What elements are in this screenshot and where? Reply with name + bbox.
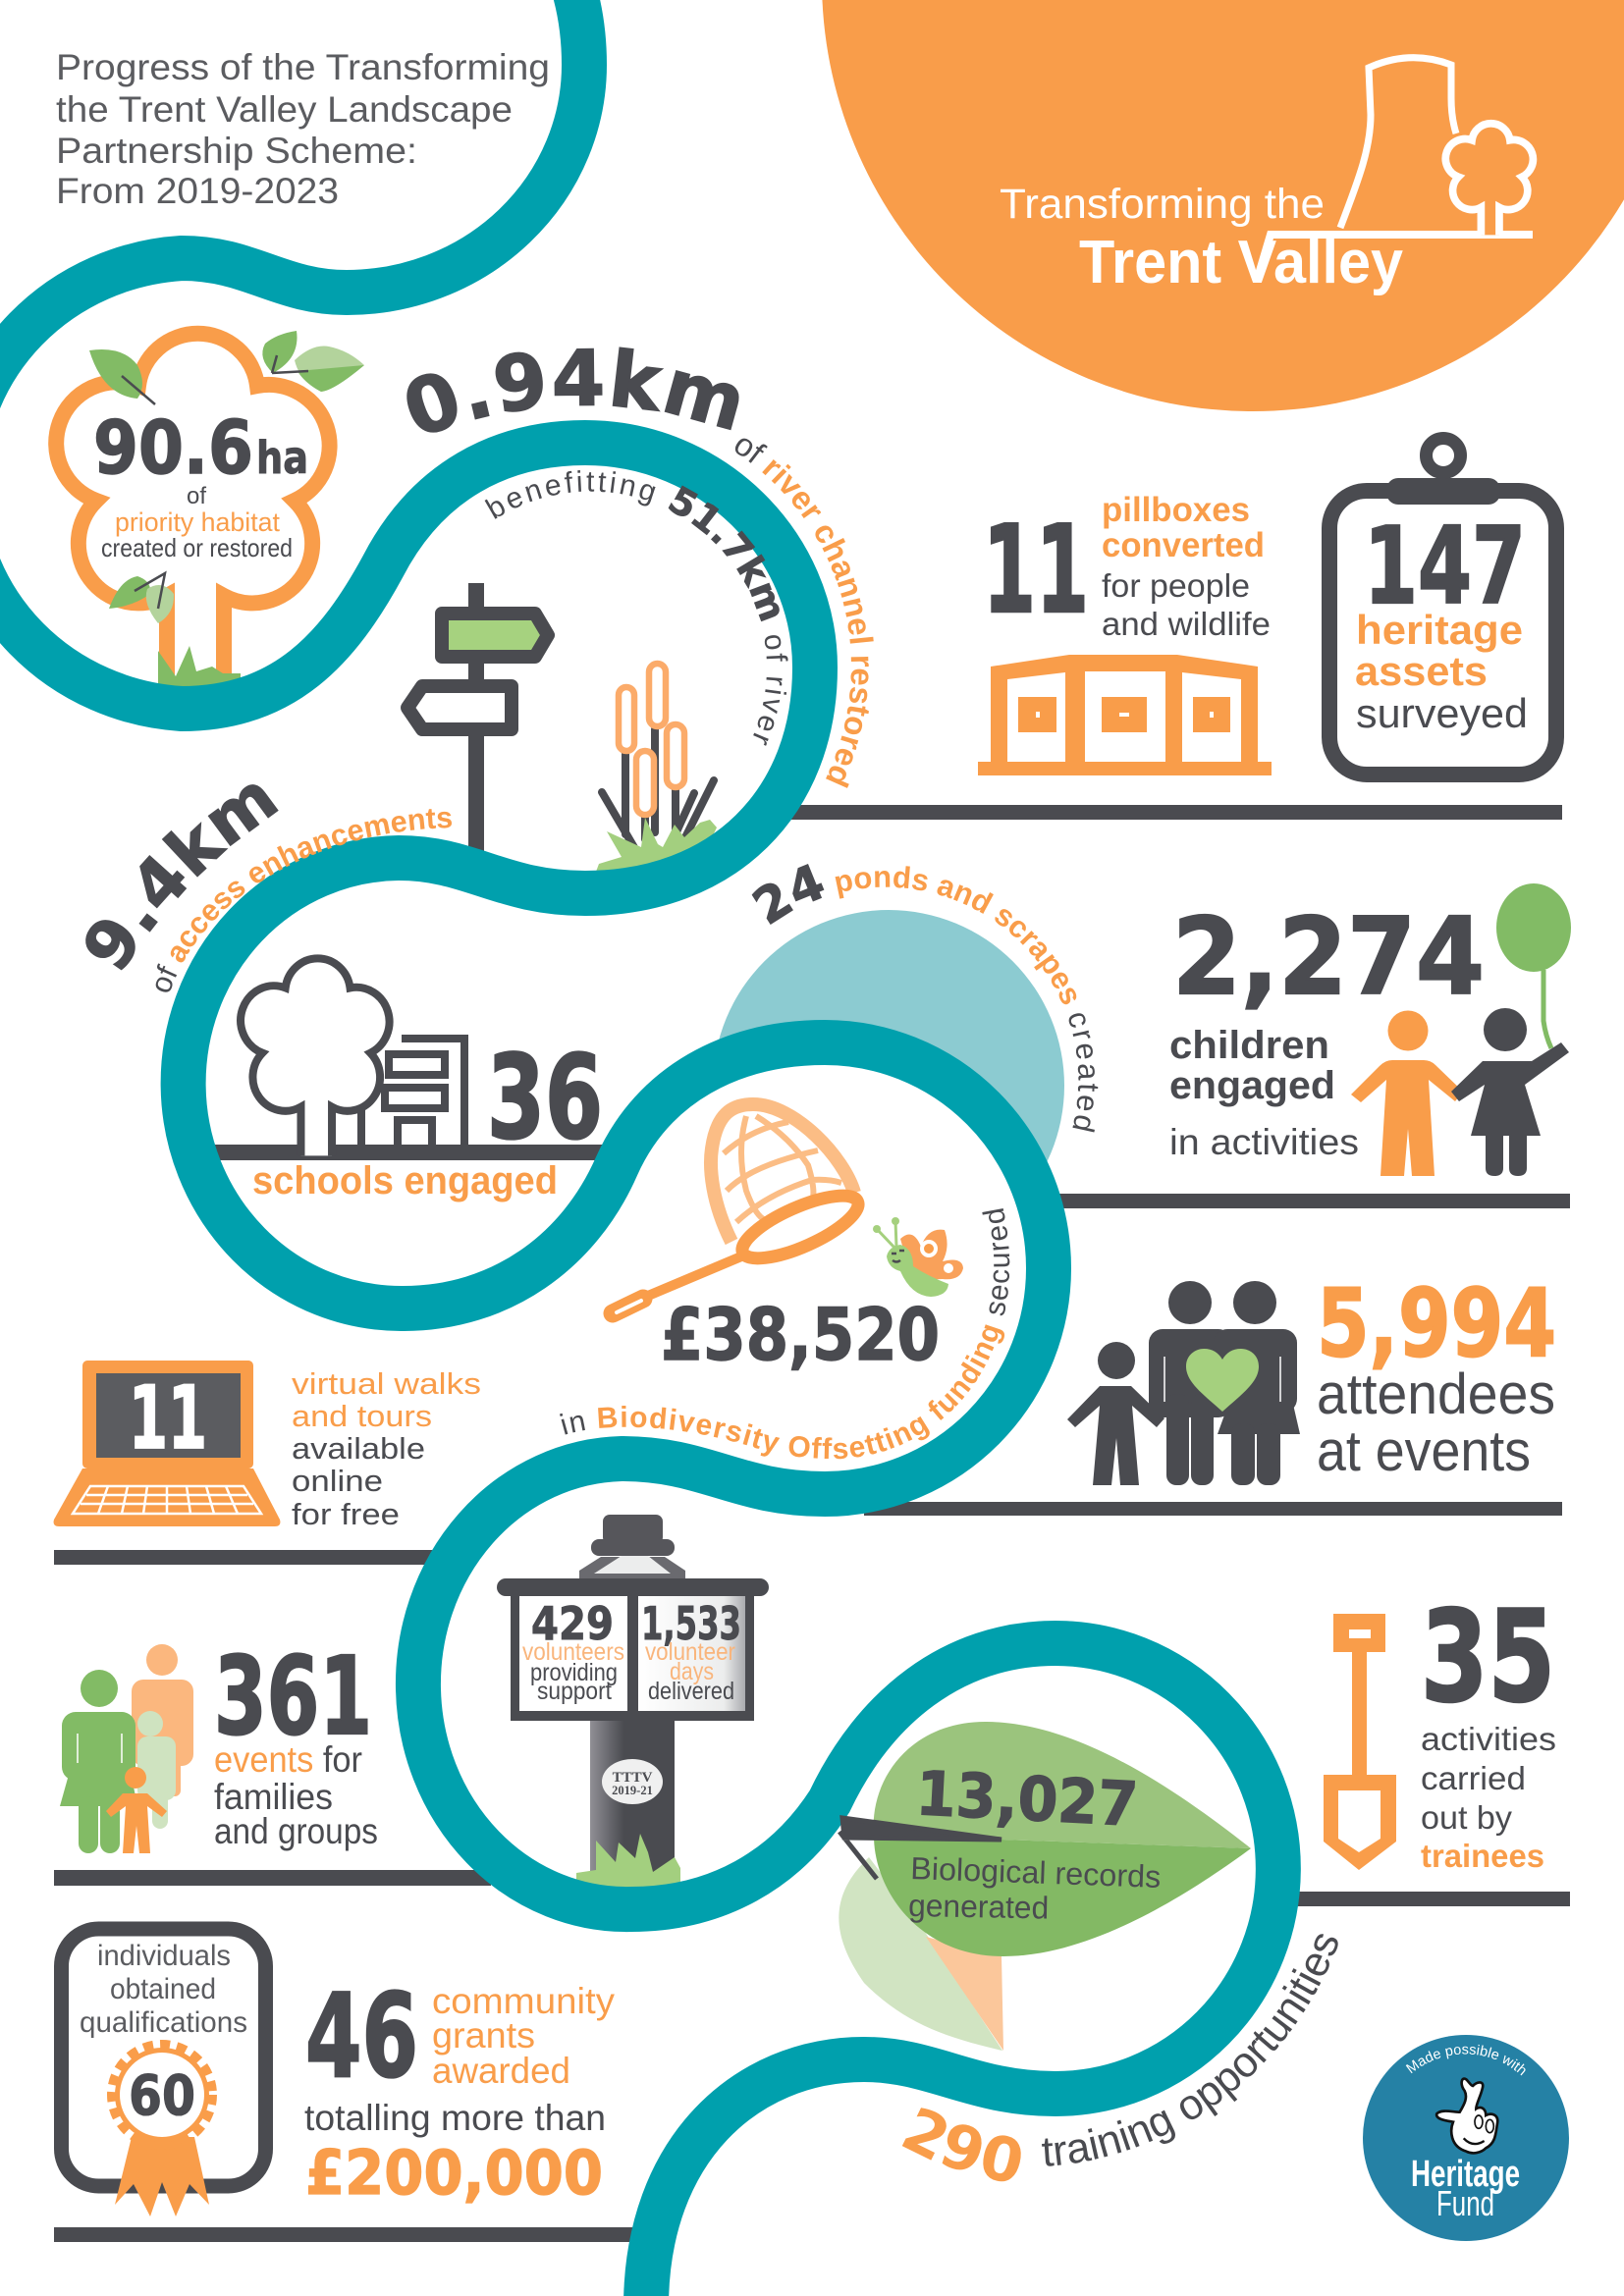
stat: 90.6ha priority habitat: created or restored [101,533,293,562]
laptop base [54,1468,280,1526]
icon: signpost [407,583,548,853]
balloon string [1543,970,1551,1048]
stat: virtual walks: and tours [292,1399,432,1433]
icon: butterfly net [613,1104,866,1313]
panel: clipboard 147 heritage assets [1329,438,1556,774]
stat: 361 events [214,1633,378,1851]
curved text: in Biodiversity Offsetting funding secured: in Biodiversity Offsetting funding secured [560,1208,1009,1459]
post plaque: 2019-21 [612,1784,653,1797]
leaf text [908,1850,1162,1925]
curved text: access enhancements: of access enhancements [155,809,452,992]
title: the Trent Valley Landscape [56,89,513,130]
shovel blade [1324,1775,1396,1870]
panel: clipboard 147 heritage assets: assets [1355,648,1488,694]
clipboard ring [1426,438,1461,473]
stat: virtual walks: available [292,1431,425,1466]
curved text: river channel restored: of river channel restored [734,438,874,788]
leaf top right dark [262,331,297,373]
icon: orange tree with leaves [56,331,364,692]
stat: 36 schools: schools engaged [252,1159,558,1202]
stat: 90.6ha priority habitat: 90.6 [93,404,253,491]
volunteers text: 429 [531,1597,614,1650]
shovel handle [1333,1614,1385,1652]
stat: 46 community grants [304,1968,616,2209]
logo: Heritage Fund [1363,2035,1569,2241]
orange child [1351,1011,1463,1176]
shovel shaft [1352,1652,1367,1775]
icon: people group [60,1644,193,1853]
volunteers text: providing [530,1659,618,1686]
badge arc text: Made possible with [1406,2044,1526,2075]
curved text: benefitting 51.7km of river: benefitting 51.7km of river [485,470,787,746]
logo text line 2: Trent Valley [1079,229,1403,296]
keyboard [73,1486,261,1514]
qualifications text [80,1940,247,2039]
butterfly wings [900,1230,963,1279]
stat: virtual walks [292,1366,481,1531]
icon: logo tree [1445,124,1533,235]
stat: 11 pillboxes: 11 [983,501,1089,641]
butterfly antennae [877,1221,896,1249]
family man [1168,1281,1212,1324]
title: From 2019-2023 [56,171,339,211]
rosette: 60 [129,2064,195,2128]
icon: butterfly [873,1217,963,1297]
title: Progress of the Transforming [56,47,550,87]
stat: 2,274 children: engaged [1169,1064,1335,1107]
reed stems [602,729,714,849]
clipboard clip [1386,478,1500,505]
net grip [613,1299,643,1313]
stat: 90.6ha priority habitat: ha [256,432,308,484]
stat: 46 community grants: community [432,1981,616,2021]
rosette [112,2045,212,2216]
stat: 11 pillboxes: for people [1102,567,1250,604]
tree outline [56,334,330,682]
panel: clipboard 147 heritage assets: surveyed [1356,690,1528,736]
volunteers text: volunteers [522,1638,624,1666]
icon: crossed fingers hand [1436,2079,1497,2153]
arm gaps [1164,1357,1280,1402]
icon: pillbox [978,655,1272,775]
circle interior mask [599,1042,1047,1494]
post roof [497,1578,769,1596]
leaf bottom left [109,576,150,609]
stat: 35 activities: 35 [1421,1584,1555,1731]
qualifications frame [61,1929,265,2186]
pale leaf [839,1857,1002,2051]
curved text: 24 ponds and scrapes created: 24 ponds and scrapes created [752,864,1098,1133]
stat: 36 schools [252,1030,603,1202]
icon: cooling tower [1340,58,1456,228]
stat: £38,520: £38,520 [661,1294,940,1377]
dark child [1451,1008,1569,1176]
leaf text: generated [908,1888,1049,1925]
stat: 11 pillboxes: converted [1102,526,1265,564]
green woman [60,1670,137,1853]
logo text line 1: Transforming the [1000,181,1325,228]
volunteer days text: days [670,1658,714,1685]
post panel right [638,1596,745,1711]
stat: 2,274 children: in activities [1169,1122,1359,1162]
stat: 290 curved: 290 [901,2108,1021,2181]
leaf number: 13,027 [914,1757,1140,1841]
heart [1186,1349,1259,1412]
icon: large leaf with records [839,1722,1251,2051]
qualifications text: obtained [110,1973,216,2005]
badge circle [1363,2035,1569,2241]
stat: 46 community grants: grants [432,2015,535,2056]
pond circle [713,910,1064,1261]
badge text: Heritage [1411,2154,1520,2195]
balloon [1496,883,1571,972]
icon: reeds [596,664,717,888]
divider lines [54,805,1570,2242]
logo ground line [1257,235,1533,281]
light green child [137,1711,176,1829]
peach leaf [926,1937,1003,2051]
volunteer days text: 1,533 [641,1597,741,1650]
volunteer days text: volunteer [645,1638,735,1666]
panel: clipboard 147 heritage assets: heritage [1356,607,1523,653]
leaf bottom right [146,585,174,623]
stat: 5,994 attendees: 5,994 [1317,1270,1556,1378]
stat: 35 activities: activities [1421,1721,1556,1757]
laptop screen [96,1373,241,1458]
stat: 35 activities: out by [1421,1799,1513,1836]
post plaque: TTTV [613,1770,653,1786]
stat: 2,274 children: children [1169,1024,1329,1067]
icon: volunteer post [497,1515,769,1895]
post shaft [590,1718,675,1893]
stat: 36 schools: 36 [487,1030,603,1165]
volunteers text: support [537,1678,612,1705]
post grass [576,1834,680,1895]
clipboard text: 147 [1364,506,1526,628]
stat: virtual walks: virtual walks [292,1366,481,1401]
orange child [106,1767,167,1853]
post [468,583,484,853]
net mesh [724,1116,841,1222]
leaf stems [122,355,308,609]
icon: children with balloon [1351,883,1571,1176]
stat: 5,994 attendees: at events [1317,1419,1531,1483]
panel: 60 qualifications [61,1929,265,2216]
icon: family with heart [1067,1281,1300,1485]
stat: virtual walks: online [292,1464,383,1498]
title [56,47,550,211]
leaf top left [89,349,142,399]
stat: 9.4km curved: 9.4km [85,784,279,970]
butterfly body [887,1245,948,1297]
stat: 90.6ha priority habitat [93,404,308,562]
stat: 35 activities: trainees [1421,1838,1544,1874]
stat: 46 community grants: awarded [432,2051,570,2091]
logo: Heritage Fund: Fund [1436,2183,1494,2223]
stat: 35 activities: carried [1421,1760,1526,1796]
tree grass [158,646,241,692]
leaf top half [874,1722,1251,1848]
volunteer days text: delivered [648,1678,734,1705]
net basket [711,1104,854,1242]
leaf text: Biological records [910,1850,1162,1895]
qualifications text: individuals [97,1940,231,1972]
stat: 5,994 attendees: attendees [1317,1362,1555,1426]
stat: 2,274 children: 2,274 [1172,896,1485,1019]
leaf bottom half [874,1836,1251,1956]
stat: 361 events: events for [214,1739,362,1780]
icon: school and tree [241,958,464,1155]
curved text: training opportunities: training opportunities [1042,1934,1338,2166]
post plaque [602,1759,663,1804]
family child [1098,1342,1135,1379]
stat: 361 events: families [214,1777,333,1817]
clipboard frame [1329,491,1556,774]
stat: 46 community grants: 46 [305,1968,418,2104]
stat: 11 pillboxes: pillboxes [1102,491,1250,529]
qualifications text: qualifications [80,2006,247,2039]
leaf stem [839,1818,1001,1879]
post frame [511,1590,754,1721]
net handle [648,1256,741,1296]
leaf top right light [295,347,364,392]
stat: 11 pillboxes: and wildlife [1102,606,1271,642]
laptop lid [82,1361,253,1468]
post cap [579,1515,685,1578]
logo: Transforming the Trent Valley [1000,58,1533,296]
lower sign [407,686,512,729]
reed heads [619,664,684,815]
header orange circle [822,0,1624,411]
stat: 90.6ha priority habitat: priority habitat [115,507,280,537]
stat: 35 activities [1421,1584,1556,1874]
light orange adult [132,1644,193,1796]
stat: 90.6ha priority habitat: of [187,483,206,509]
volunteers text [522,1597,624,1705]
stat: 2,274 children [1169,896,1485,1162]
icon: laptop [54,1361,280,1526]
reed grass [596,818,717,888]
volunteer days text [641,1597,741,1705]
stat: 46 community grants: £200,000 [305,2137,603,2209]
butterfly face [892,1251,904,1262]
upper sign [442,614,548,657]
stat: 11 pillboxes [983,491,1271,642]
stat: 361 events: 361 [214,1633,372,1759]
stat: virtual walks: for free [292,1497,400,1531]
stat: 361 events: and groups [214,1811,378,1851]
post panel left [519,1596,627,1711]
icon: shovel [1324,1614,1396,1870]
title: Partnership Scheme: [56,131,417,171]
stat: 46 community grants: totalling more than [304,2098,606,2138]
laptop number: 11 [129,1367,207,1468]
stat: 5,994 attendees [1317,1270,1556,1483]
family woman [1233,1281,1276,1324]
net hoop [734,1184,866,1270]
stat: 0.94km curved: 0.94km [406,347,739,433]
river [0,0,1278,2296]
